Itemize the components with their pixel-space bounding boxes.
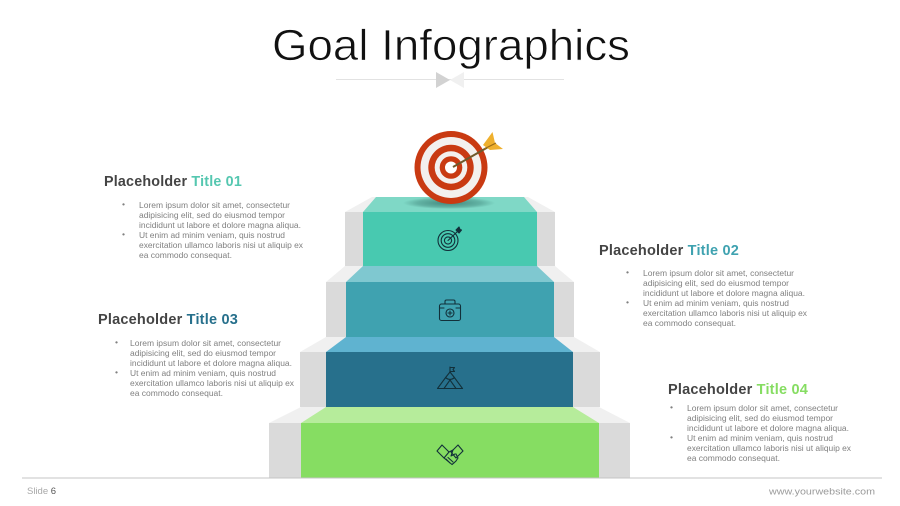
body 01: incididunt ut labore et dolore magna aliqua.: [139, 220, 301, 230]
body 01: •: [122, 229, 125, 239]
icon: target: [438, 227, 462, 250]
text block: title 03: [98, 312, 295, 398]
body 02: •: [626, 297, 629, 307]
body 01: adipisicing elit, sed do eiusmod tempor: [139, 210, 285, 220]
body 04: Ut enim ad minim veniam, quis nostrud: [687, 433, 833, 443]
step 1 teal: [363, 197, 537, 266]
step 4 side walls: [269, 407, 630, 478]
body 04: •: [670, 432, 673, 442]
body 04: •: [670, 402, 673, 412]
heading 02: Placeholder Title 02: [599, 243, 739, 259]
text block: title 01: [104, 174, 304, 260]
icon: first aid case: [440, 300, 460, 320]
body 02: Ut enim ad minim veniam, quis nostrud: [643, 298, 789, 308]
body 01: [122, 199, 304, 260]
large target with arrow: [403, 131, 503, 209]
step 3 dark blue: [326, 337, 573, 407]
body 03: [115, 337, 295, 398]
title divider with bow-tie ornament: [336, 72, 564, 88]
body 03: •: [115, 367, 118, 377]
step 3 side walls: [300, 337, 600, 407]
body 02: ea commodo consequat.: [643, 318, 736, 328]
body 03: Ut enim ad minim veniam, quis nostrud: [130, 368, 276, 378]
body 02: •: [626, 267, 629, 277]
body 02: Lorem ipsum dolor sit amet, consectetur: [643, 268, 794, 278]
body 03: ea commodo consequat.: [130, 388, 223, 398]
body 02: [626, 267, 808, 328]
text block: title 04: [668, 382, 852, 463]
body 01: ea commodo consequat.: [139, 250, 232, 260]
website: www.yourwebsite.com: [768, 486, 875, 498]
body 04: adipisicing elit, sed do eiusmod tempor: [687, 413, 833, 423]
title: Goal Infographics: [272, 21, 630, 70]
body 02: adipisicing elit, sed do eiusmod tempor: [643, 278, 789, 288]
step 2 blue-teal: [346, 266, 554, 337]
body 04: Lorem ipsum dolor sit amet, consectetur: [687, 403, 838, 413]
body 03: Lorem ipsum dolor sit amet, consectetur: [130, 338, 281, 348]
step 4 green: [301, 407, 599, 478]
baseline rule: [22, 478, 882, 479]
body 02: exercitation ullamco laboris nisi ut aliquip ex: [643, 308, 808, 318]
body 03: adipisicing elit, sed do eiusmod tempor: [130, 348, 276, 358]
body 01: exercitation ullamco laboris nisi ut aliquip ex: [139, 240, 304, 250]
heading 04: Placeholder Title 04: [668, 382, 808, 398]
body 04: [670, 402, 852, 463]
text block: title 02: [599, 243, 808, 328]
staircase: [269, 197, 630, 478]
icon: handshake: [437, 445, 463, 464]
body 03: incididunt ut labore et dolore magna aliqua.: [130, 358, 292, 368]
icon: mountain with flag: [438, 367, 462, 388]
body 04: ea commodo consequat.: [687, 453, 780, 463]
body 04: exercitation ullamco laboris nisi ut aliquip ex: [687, 443, 852, 453]
body 01: Lorem ipsum dolor sit amet, consectetur: [139, 200, 290, 210]
heading 03: Placeholder Title 03: [98, 312, 238, 328]
body 03: •: [115, 337, 118, 347]
body 01: •: [122, 199, 125, 209]
body 03: exercitation ullamco laboris nisi ut aliquip ex: [130, 378, 295, 388]
step 1 side walls: [345, 197, 555, 266]
body 02: incididunt ut labore et dolore magna aliqua.: [643, 288, 805, 298]
slide number: Slide 6: [27, 486, 56, 497]
step 2 side walls: [326, 266, 574, 337]
body 01: Ut enim ad minim veniam, quis nostrud: [139, 230, 285, 240]
body 04: incididunt ut labore et dolore magna aliqua.: [687, 423, 849, 433]
heading 01: Placeholder Title 01: [104, 174, 242, 190]
